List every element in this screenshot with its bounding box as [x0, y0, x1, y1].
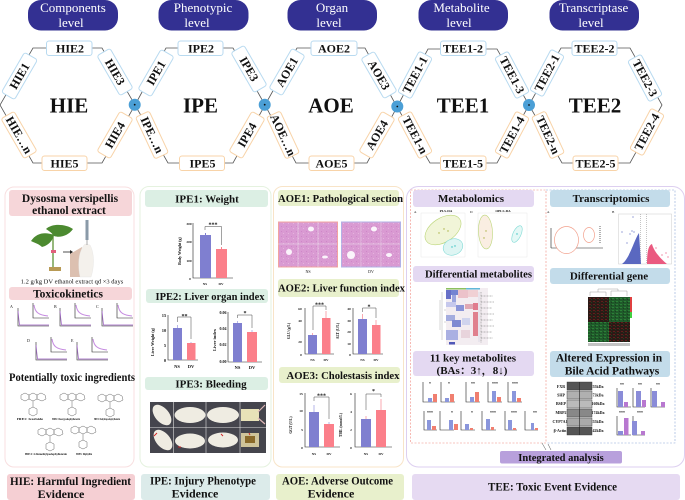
hexagon: IPE: IPE…n: [137, 115, 167, 156]
hexagon: HIE: HIE1: [6, 60, 33, 92]
hexagon: TEE2: TEE2-5: [575, 156, 616, 170]
heading: transcriptomics: Transcriptomics: [573, 193, 650, 205]
chart: metabolite bars row 2: ***: [427, 410, 433, 415]
chart: liver index: 0.02: [220, 342, 226, 347]
chart: TBIL: NS: [364, 452, 368, 456]
chart: liver weight: Liver Weight (g): [150, 327, 155, 356]
heading: differential gene: [550, 268, 670, 284]
chart: ALT: 20: [347, 330, 351, 334]
hexagon: TEE1: TEE1: [437, 94, 489, 118]
chemical structures: HIE4: 4-Demethylpodophyllotoxin: [25, 452, 67, 456]
chart: liver weight: 0: [164, 358, 167, 363]
chart: score plot A: PLS-DA: [440, 209, 453, 213]
chart: ALT: DV: [373, 358, 379, 362]
chart: protein bars: ***: [637, 410, 643, 415]
histology sections: DV: [368, 269, 374, 274]
heading: differential gene: Differential gene: [570, 270, 648, 282]
charts: toxicokinetic curves: [10, 303, 133, 360]
arrows to integrated analysis: [542, 443, 551, 450]
heading: IPE3: IPE3: Bleeding: [175, 378, 247, 390]
chart: ALT: 30: [347, 319, 351, 323]
chart: score plot D: D: [470, 210, 473, 214]
chart: TBIL: 2: [350, 428, 352, 432]
chart: liver index: 0.00: [220, 359, 226, 364]
heading: toxicokinetics: Toxicokinetics: [33, 288, 103, 300]
western blot: FXR: [557, 384, 565, 389]
pill: Components level: [28, 0, 118, 30]
hexagon: HIE: HIE5: [50, 156, 79, 170]
chart: liver index: [212, 310, 262, 370]
chart: ALT: *: [368, 304, 370, 310]
pill: Organ level: [288, 0, 377, 30]
western blot: 42kDa: [592, 428, 604, 433]
chemical structures: HIE5: Diphyllin: [76, 452, 92, 456]
chart: body weight: 300: [186, 222, 192, 226]
chart: metabolite bars row 1: *: [429, 381, 431, 386]
chart: metabolite bars row 2: ***: [511, 410, 517, 415]
hexagon: AOE: AOE5: [315, 156, 348, 170]
chart: ALT: 10: [347, 342, 351, 346]
western blot: 73kDa: [592, 392, 604, 398]
chart: PCA: [547, 210, 603, 254]
dose note: 1.2 g/kg DV ethanol extract qd ×3 days: [21, 278, 124, 286]
chart: liver index: DV: [249, 365, 256, 370]
chart: liver index: *: [244, 311, 246, 317]
chart: liver weight: **: [182, 314, 188, 320]
evidence label: HIE: HIE: Harmful Ingredient: [10, 474, 131, 488]
chart: liver index: 0.04: [220, 326, 226, 331]
chart: metabolite bars row 1: ***: [512, 381, 518, 386]
chart: TBIL: 0: [350, 446, 352, 450]
chart: GGT: [289, 392, 340, 456]
pill: Phenotypic level: [158, 0, 248, 30]
chart: liver index: 0.06: [220, 310, 226, 315]
pill: Phenotypic level: Phenotypic: [174, 0, 232, 15]
chart: TBIL: 6: [350, 392, 352, 396]
chart: GGT: 0: [301, 446, 303, 450]
transcript box: [546, 190, 675, 443]
western blot: β-Actin: [554, 428, 567, 433]
panel: TEE: [406, 186, 684, 500]
hexagon: AOE: AOE: [308, 94, 354, 118]
heading: toxicokinetics: [9, 287, 132, 300]
chart: body weight: 100: [186, 259, 192, 263]
charts: toxicokinetic curves: A: [10, 304, 13, 309]
icon: rat injection: [70, 220, 94, 277]
chart: liver weight: NS: [174, 364, 180, 369]
western blot: 160kDa: [591, 401, 605, 406]
chemical structures: HIE1: Icariside: [17, 417, 44, 421]
evidence label: AOE: [276, 474, 404, 500]
hexagon: HIE: HIE: [50, 94, 88, 118]
chart: protein bars: [617, 382, 665, 435]
chart: GLU: 60: [298, 307, 302, 311]
heading: metabolomics: Metabolomics: [438, 193, 505, 205]
heading: key metabolites: (BAs：3↑，8↓): [437, 365, 508, 377]
link nodes: [129, 99, 535, 112]
evidence label: IPE: IPE: Injury Phenotype: [150, 474, 257, 488]
hexagon: TEE2: TEE2: [569, 94, 621, 118]
hexagon: TEE2: TEE2-n: [533, 114, 563, 157]
chart: TBIL: DV: [378, 452, 384, 456]
heading: AOE3: AOE3: Cholestasis index: [286, 370, 400, 382]
heading: IPE1: [145, 190, 268, 207]
histology sections: NS: [305, 269, 311, 274]
western blot: [552, 382, 605, 435]
hexagon: HIE: HIE4: [102, 119, 128, 151]
hexagon: AOE: [265, 41, 397, 170]
photo: rats: [149, 401, 266, 454]
hexagon: TEE1: [397, 41, 529, 170]
pill: Transcriptase level: Transcriptase: [559, 0, 629, 15]
chart: body weight: ***: [208, 222, 218, 228]
hexagon: IPE: IPE5: [189, 156, 216, 170]
evidence label: IPE: [141, 474, 270, 500]
chart: GLU: NS: [310, 358, 315, 362]
charts: toxicokinetic curves: B: [54, 304, 57, 309]
charts: toxicokinetic curves: C: [96, 304, 99, 309]
chart: liver weight: 15: [162, 313, 167, 318]
integrated analysis: Integrated analysis: [518, 453, 604, 464]
hexagon: TEE2: TEE2-3: [629, 57, 661, 99]
chart: protein bars: ***: [619, 410, 625, 415]
evidence label: TEE: TEE: Toxic Event Evidence: [488, 480, 618, 494]
hexagon: IPE: IPE: [183, 94, 218, 118]
western blot: 55kDa: [592, 384, 604, 389]
pill: Transcriptase level: [550, 0, 639, 30]
hexagon: TEE1: TEE1-n: [399, 114, 431, 157]
hexagon: IPE: IPE4: [234, 120, 260, 150]
chart: body weight: DV: [218, 282, 224, 286]
western blot: CYP7A1: [552, 419, 568, 424]
heading: extract: [9, 190, 132, 217]
chart: ALT: ALT (U/L): [336, 322, 340, 339]
chart: GGT: DV: [326, 452, 332, 456]
chart: protein bars: **: [620, 382, 624, 387]
heading: IPE2: IPE2: Liver organ index: [156, 291, 265, 303]
chart: volcano plot: B: [612, 210, 615, 214]
heading: AOE3: [279, 367, 400, 383]
chart: GLU: 40: [298, 319, 302, 323]
pill: Transcriptase level: level: [578, 15, 604, 30]
hexagon: IPE: IPE1: [143, 58, 169, 88]
chart: GGT: ***: [317, 394, 326, 400]
level pills: [28, 0, 639, 30]
chart: metabolite bars row 1: *: [448, 381, 450, 386]
panel: AOE: [274, 186, 405, 500]
heading: extract: ethanol extract: [32, 205, 106, 217]
chart: GLU: GLU (g/L): [287, 322, 291, 339]
hexagon: TEE1: TEE1-5: [443, 156, 483, 170]
evidence label: TEE: [412, 474, 680, 500]
western blot: MRP2: [555, 410, 567, 415]
chart: GGT: 5: [301, 428, 303, 432]
hexagon: TEE1: TEE1-2: [443, 42, 483, 56]
hexagon: AOE: AOE2: [318, 42, 350, 56]
chemical structures: [17, 393, 123, 456]
western blot: 55kDa: [592, 419, 604, 424]
chart: GLU: [287, 302, 334, 362]
chart: ALT: 0: [349, 353, 351, 357]
pill: Components level: Components: [40, 0, 106, 15]
chart: protein bars: **: [656, 382, 660, 387]
chart: body weight: NS: [203, 282, 207, 286]
chart: TBIL: TBIL (mmol/L): [339, 412, 343, 437]
chart: GLU: ***: [315, 302, 324, 308]
heading: key metabolites: 11 key metabolites: [430, 352, 517, 364]
chart: GLU: 20: [298, 340, 302, 344]
chart: protein bars: **: [638, 382, 642, 387]
heading: extract: Dysosma versipellis: [22, 193, 119, 205]
heading: metabolomics: [413, 190, 534, 207]
chart: score plot A: [414, 209, 466, 258]
hexagon: HIE: [0, 41, 135, 170]
hexagon: TEE1: TEE1-1: [399, 54, 431, 96]
chart: metabolite bars row 2: *: [471, 410, 473, 415]
chart: metabolite bars row 2: [424, 410, 538, 430]
chart: liver weight: 5: [164, 343, 167, 348]
chart: body weight: [177, 222, 233, 286]
chart: GGT: 10: [299, 409, 303, 413]
western blot: SHP: [557, 392, 565, 398]
chart: liver index: NS: [235, 365, 241, 370]
hexagon: AOE: AOE1: [273, 55, 301, 89]
heading: AOE2: AOE2: Liver function index: [278, 282, 405, 294]
hexagon: IPE: IPE2: [188, 42, 214, 56]
chart: GGT: GGT (U/L): [289, 416, 293, 434]
hexagon: AOE: AOE4: [363, 118, 391, 152]
pill: Metabolite level: [418, 0, 508, 30]
chart: body weight: 0: [189, 277, 191, 281]
pill: Metabolite level: level: [446, 15, 472, 30]
chart: ALT: NS: [360, 358, 365, 362]
hexagon: TEE1: TEE1-3: [496, 54, 528, 96]
chart: body weight: Body Weight (g): [177, 236, 182, 265]
chart: score plot D: [470, 209, 527, 257]
chart: score plot D: OPLS-DA: [495, 209, 511, 213]
hexagon: AOE: AOE…n: [267, 112, 299, 158]
chemical structures: HIE2: Deoxypodophyllotoxin: [52, 417, 80, 421]
western blot: BSEP: [556, 401, 567, 406]
hexagon: IPE: [135, 41, 267, 170]
pill: Organ level: level: [316, 15, 342, 30]
metabolite box: [410, 190, 546, 443]
hexagon: IPE: IPE3: [236, 54, 262, 84]
panel: HIE: [5, 187, 135, 500]
chart: liver weight: [150, 313, 198, 369]
chart: GGT: 15: [299, 392, 303, 396]
chart: GLU: DV: [323, 358, 329, 362]
integrated analysis: [500, 451, 622, 464]
heading: bile acid pathways: Altered Expression in: [556, 352, 663, 364]
heading: toxic ingredients: Potentially toxic ingredients: [9, 372, 135, 384]
heading: IPE3: [145, 377, 268, 390]
heading: bile acid pathways: [550, 351, 670, 378]
pill: Components level: level: [58, 15, 84, 30]
chart: metabolite bars row 2: ***: [490, 410, 496, 415]
chart: body weight: 200: [186, 240, 192, 244]
hexagon: AOE: AOE3: [365, 58, 393, 92]
heading: differential metabolites: Differential metabolites: [425, 270, 532, 280]
chart: score plot A: A: [414, 210, 417, 214]
heading: transcriptomics: [550, 190, 670, 207]
chart: TBIL: [339, 389, 392, 456]
chemical structures: HIE3: Dehydropodophyllotoxin: [94, 417, 120, 421]
hexagon: TEE2: TEE2-2: [574, 42, 615, 56]
evidence label: HIE: [7, 474, 135, 500]
chart: TBIL: 4: [350, 410, 352, 414]
charts: toxicokinetic curves: E: [71, 338, 74, 343]
chart: PCA: A: [547, 210, 550, 214]
hexagon: TEE1: TEE1-4: [496, 114, 528, 156]
arrow: [63, 250, 73, 254]
hexagon chain: [0, 41, 664, 170]
histology sections: [278, 222, 400, 274]
heading: bile acid pathways: Bile Acid Pathways: [565, 366, 660, 378]
hexagon: TEE2: TEE2-4: [631, 111, 663, 153]
chart: GGT: NS: [312, 452, 316, 456]
chart: metabolite bars row 2: *: [451, 410, 453, 415]
icon: plant: [31, 225, 73, 271]
chart: TBIL: *: [372, 389, 375, 395]
heatmap: metabolites: [440, 288, 494, 345]
hexagon: TEE2: TEE2-1: [531, 52, 563, 94]
chart: metabolite bars row 1: ***: [492, 381, 498, 386]
hexagon: HIE: HIE3: [102, 56, 128, 88]
chart: metabolite bars row 1: [423, 381, 522, 402]
heatmap: genes: [588, 289, 632, 346]
evidence label: AOE: AOE: Adverse Outcome: [282, 474, 394, 488]
hexagon: HIE: HIE2: [56, 42, 84, 56]
chart: GLU: 0: [300, 353, 302, 357]
chart: liver weight: 10: [162, 328, 167, 333]
chart: ALT: 40: [347, 307, 351, 311]
pill: Phenotypic level: level: [184, 15, 210, 30]
heading: AOE1: AOE1: Pathological section: [278, 193, 403, 205]
hexagon: TEE2: [529, 41, 664, 170]
chart: metabolite bars row 2: **: [533, 410, 537, 415]
chart: ALT: [336, 304, 383, 362]
panel: IPE: [140, 186, 271, 500]
heading: key metabolites: [413, 351, 534, 377]
hexagon: HIE: HIE…n: [3, 114, 35, 156]
charts: toxicokinetic curves: D: [27, 338, 30, 343]
heading: differential metabolites: [413, 266, 534, 282]
chart: liver index: Liver index: [212, 328, 217, 351]
pill: Metabolite level: Metabolite: [433, 0, 490, 15]
heading: AOE2: [278, 279, 405, 297]
western blot: 174kDa: [591, 410, 605, 415]
chart: liver weight: DV: [188, 364, 195, 369]
pill: Organ level: Organ: [316, 0, 349, 15]
chart: volcano plot: [612, 210, 672, 264]
heading: IPE1: IPE1: Weight: [175, 194, 239, 206]
chart: metabolite bars row 1: **: [471, 381, 475, 386]
